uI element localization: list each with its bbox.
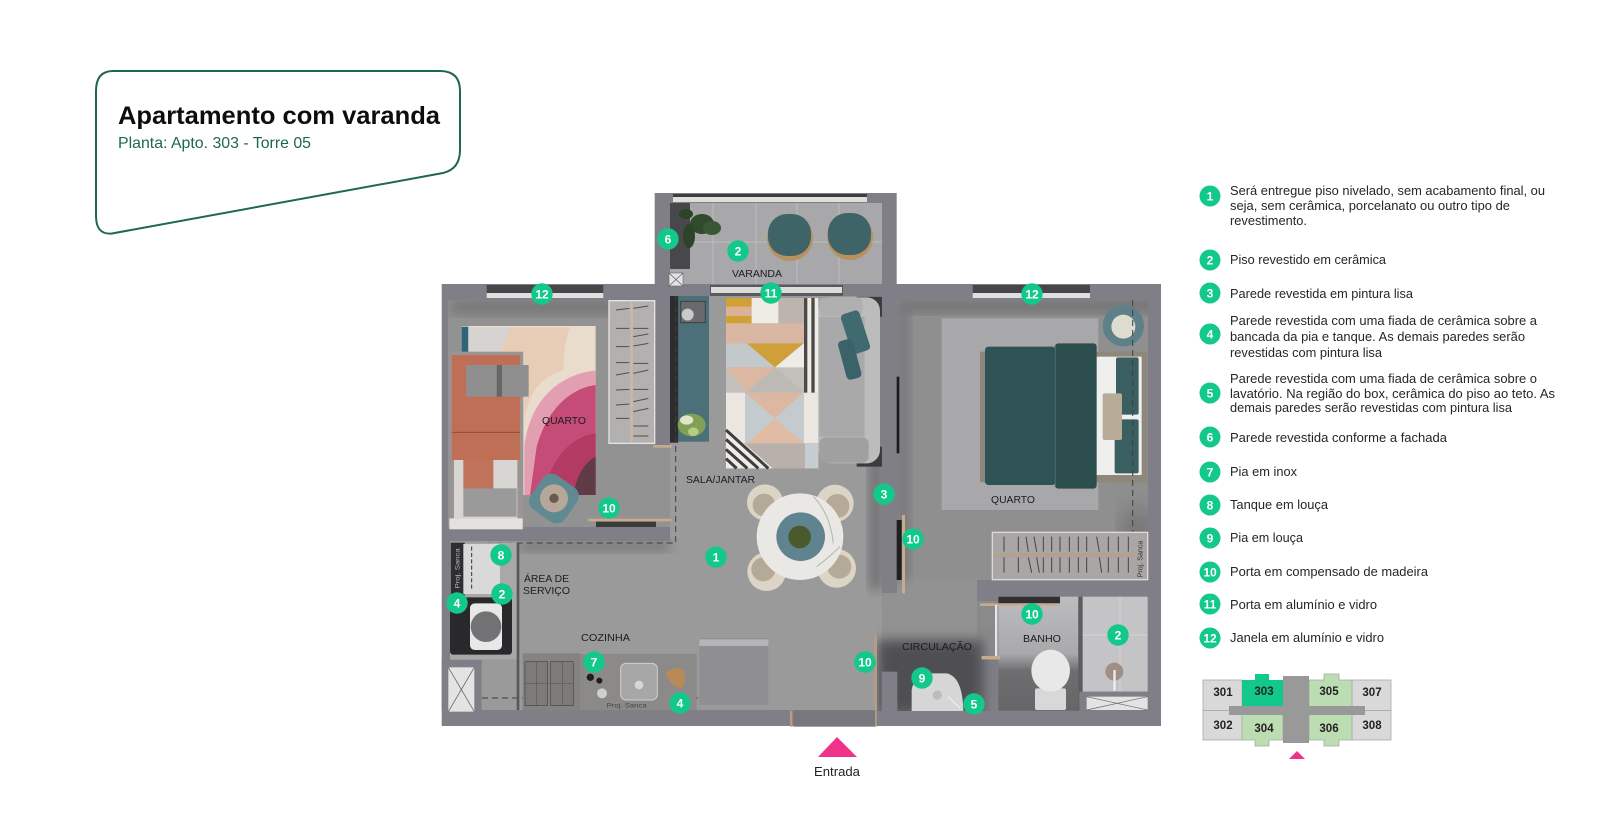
legend item 1: Será entregue piso nivelado, sem acabamento final, ou [1230,184,1545,198]
legend item 12: Janela em alumínio e vidro [1230,631,1384,645]
circulation sink [882,672,963,712]
key plan entrance arrow [1289,751,1305,759]
plan badges: 1 [713,550,720,564]
legend item 5 [1200,372,1555,415]
legend item 12 [1200,628,1384,648]
entrance marker: Entrada [814,764,861,779]
legend item 7: Pia em inox [1230,465,1298,479]
utility shaft [442,660,482,712]
living room furniture [726,297,882,591]
unit numbers: 304 [1254,723,1274,735]
plan badges: 2 [1115,628,1122,642]
stove [523,653,580,710]
plan badges: 2 [735,244,742,258]
wardrobe: Proj. Sanca [1138,541,1145,577]
infographic canvas [95,70,1554,776]
core and corridor [1229,676,1365,743]
unit numbers: 308 [1362,720,1382,732]
bedroom door [897,515,905,593]
kitchen sink counter [580,654,697,710]
legend item 5: lavatório. Na região do box, cerâmica do piso ao teto. As [1230,387,1555,401]
legend item 1 [1200,184,1545,228]
left bedroom furniture [449,301,672,529]
room labels: CIRCULAÇÃO [902,640,972,653]
plan badges: 12 [1025,287,1039,301]
legend item 3: 3 [1207,286,1214,300]
refrigerator [699,638,768,705]
partition [517,543,519,710]
legend item 11: Porta em alumínio e vidro [1230,598,1377,612]
unit numbers: 301 [1213,687,1233,699]
plan badges: 10 [906,532,920,546]
tv console [670,296,709,443]
plan badges: 5 [971,697,978,711]
bathroom [980,597,1148,711]
legend item 1: seja, sem cerâmica, porcelanato ou outro tipo de [1230,199,1510,213]
dining table and chairs [747,484,856,591]
circulation door [874,635,877,727]
plan badges: 10 [1025,607,1039,621]
bed [449,352,529,529]
room labels: QUARTO [991,494,1035,506]
legend [1200,184,1555,648]
legend item 12: 12 [1203,631,1217,645]
plan badges: 6 [665,232,672,246]
legend item 6 [1200,426,1447,448]
legend item 6: Parede revestida conforme a fachada [1230,431,1447,445]
laundry [450,543,517,659]
geometric rug [726,298,818,468]
plan badges: 4 [677,696,684,710]
legend item 2 [1200,250,1386,270]
legend item 9 [1200,528,1303,548]
plan badges: 8 [498,548,505,562]
plant [679,209,721,248]
shaft box [669,273,683,286]
bedroom door [588,445,672,527]
room labels: VARANDA [732,268,782,280]
legend item 2: 2 [1207,253,1214,267]
laundry: Proj. Sanca [454,548,461,588]
legend item 6: 6 [1207,430,1214,444]
room labels: ÁREA DE [524,572,569,585]
bedroom window right [973,285,1090,298]
double bed [980,343,1147,489]
dashed projection lines [482,296,1133,698]
legend item 3 [1200,282,1413,304]
unit numbers: 306 [1319,723,1339,735]
legend item 10: Porta em compensado de madeira [1230,565,1428,579]
plan badges [446,228,1129,715]
legend item 10 [1200,562,1428,582]
room labels: COZINHA [581,632,630,644]
unit numbers: 303 [1254,686,1274,698]
legend item 3: Parede revestida em pintura lisa [1230,287,1413,301]
title card [96,71,460,234]
entry threshold [790,711,875,727]
bedroom window left [487,285,603,298]
bedroom door edge [897,377,899,453]
room labels: QUARTO [542,415,586,427]
legend item 4 [1200,314,1537,360]
title card: Planta: Apto. 303 - Torre 05 [118,135,311,152]
legend item 4: bancada da pia e tanque. As demais paredes serão [1230,330,1525,344]
toilet [1031,650,1070,710]
legend item 8: 8 [1207,498,1214,512]
grey rug [942,318,1098,510]
plan badges: 12 [535,287,549,301]
right bedroom furniture [897,305,1147,510]
veranda [669,194,882,286]
legend item 7 [1200,462,1298,482]
legend item 4: Parede revestida com uma fiada de cerâmica sobre a [1230,314,1537,328]
legend item 4: revestidas com pintura lisa [1230,346,1382,360]
plan badges: 9 [919,671,926,685]
legend item 5: 5 [1207,386,1214,400]
console plant [678,414,706,436]
unit numbers [1213,686,1382,735]
plan badges: 11 [765,286,778,300]
legend item 9: 9 [1207,531,1214,545]
floor plan [442,193,1161,727]
plan badges: 10 [602,501,616,515]
legend item 11: 11 [1204,597,1217,611]
wardrobe [609,301,655,443]
pouf [525,470,583,528]
legend item 11 [1200,594,1377,614]
legend item 1: revestimento. [1230,214,1307,228]
plan badges: 3 [881,487,888,501]
wardrobe, bath and circulation [790,515,1148,727]
room labels [523,268,1061,653]
legend item 9: Pia em louça [1230,531,1303,545]
wardrobe [992,532,1148,580]
plan badges: 7 [591,655,598,669]
title card: Apartamento com varanda [118,102,441,130]
plan badges: 10 [858,655,872,669]
legend item 10: 10 [1203,565,1217,579]
unit cells [1203,674,1391,746]
legend item 1: 1 [1207,189,1214,203]
unit numbers: 302 [1213,720,1233,732]
tower key plan [1203,674,1391,759]
legend item 2: Piso revestido em cerâmica [1230,253,1386,267]
room labels: SERVIÇO [523,585,570,597]
room labels: BANHO [1023,633,1061,645]
legend item 5: Parede revestida com uma fiada de cerâmica sobre o [1230,372,1537,386]
nightstand [1103,305,1144,346]
floors [448,296,1160,715]
legend item 8 [1200,494,1328,516]
plan badges: 4 [454,596,461,610]
entrance marker [814,737,861,779]
laundry and kitchen [442,543,768,712]
building walls [442,193,1161,726]
room labels: SALA/JANTAR [686,474,755,486]
unit numbers: 307 [1362,687,1382,699]
plan badges: 2 [499,587,506,601]
kitchen sink counter: Proj. Sanca [607,703,648,709]
legend item 8: Tanque em louça [1230,498,1328,512]
shower head [1105,663,1123,691]
rug [462,326,596,495]
legend item 7: 7 [1207,465,1214,479]
veranda sliding door [710,285,843,296]
unit numbers: 305 [1319,686,1339,698]
veranda chairs [767,213,873,261]
sofa [819,297,882,467]
legend item 4: 4 [1207,327,1214,341]
legend item 5: demais paredes serão revestidas com pintura lisa [1230,401,1512,415]
